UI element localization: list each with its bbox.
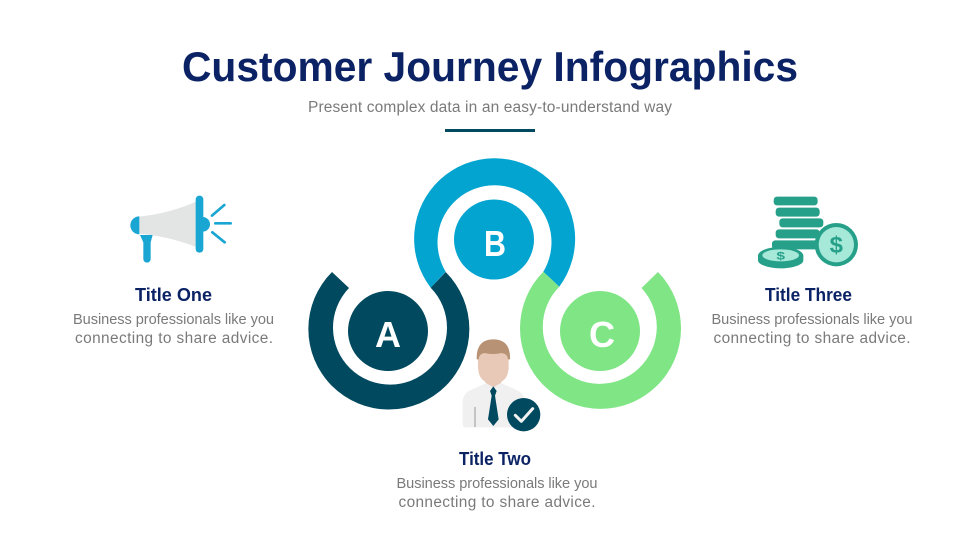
title underline: [445, 129, 535, 132]
text: Title Two body: [396, 476, 598, 511]
ring A: A: [375, 314, 401, 355]
dollar signs: $: [830, 232, 843, 258]
subtitle: Present complex data in an easy-to-understand way: [308, 99, 672, 116]
ring C: C: [589, 314, 615, 355]
ring B: [414, 158, 575, 288]
text: Title Three body: [712, 312, 912, 347]
ring A: [308, 272, 469, 409]
icon: megaphone: [130, 196, 231, 263]
heading: Title One: Title One: [135, 285, 212, 305]
ring C: [520, 272, 681, 409]
heading: Title Two: Title Two: [459, 449, 531, 469]
text: Title Two body: Business professionals like you: [396, 476, 598, 492]
icon: businessman with check badge: [463, 339, 540, 431]
text: Title Three body: Business professionals like you: [712, 312, 912, 328]
text: Title One body: [73, 312, 274, 347]
text: Title Two body: connecting to share advice.: [398, 494, 596, 511]
title: Customer Journey Infographics: [182, 43, 798, 90]
text: Title One body: Business professionals like you: [73, 312, 274, 328]
icon: coin stack: [758, 197, 858, 268]
ring B: B: [484, 223, 506, 264]
diagram: three linked rings: [308, 158, 681, 409]
text: Title One body: connecting to share advice.: [75, 330, 273, 347]
heading: Title Three: Title Three: [765, 285, 852, 305]
icon: coin stack: $: [776, 250, 786, 262]
text: Title Three body: connecting to share advice.: [714, 330, 910, 347]
